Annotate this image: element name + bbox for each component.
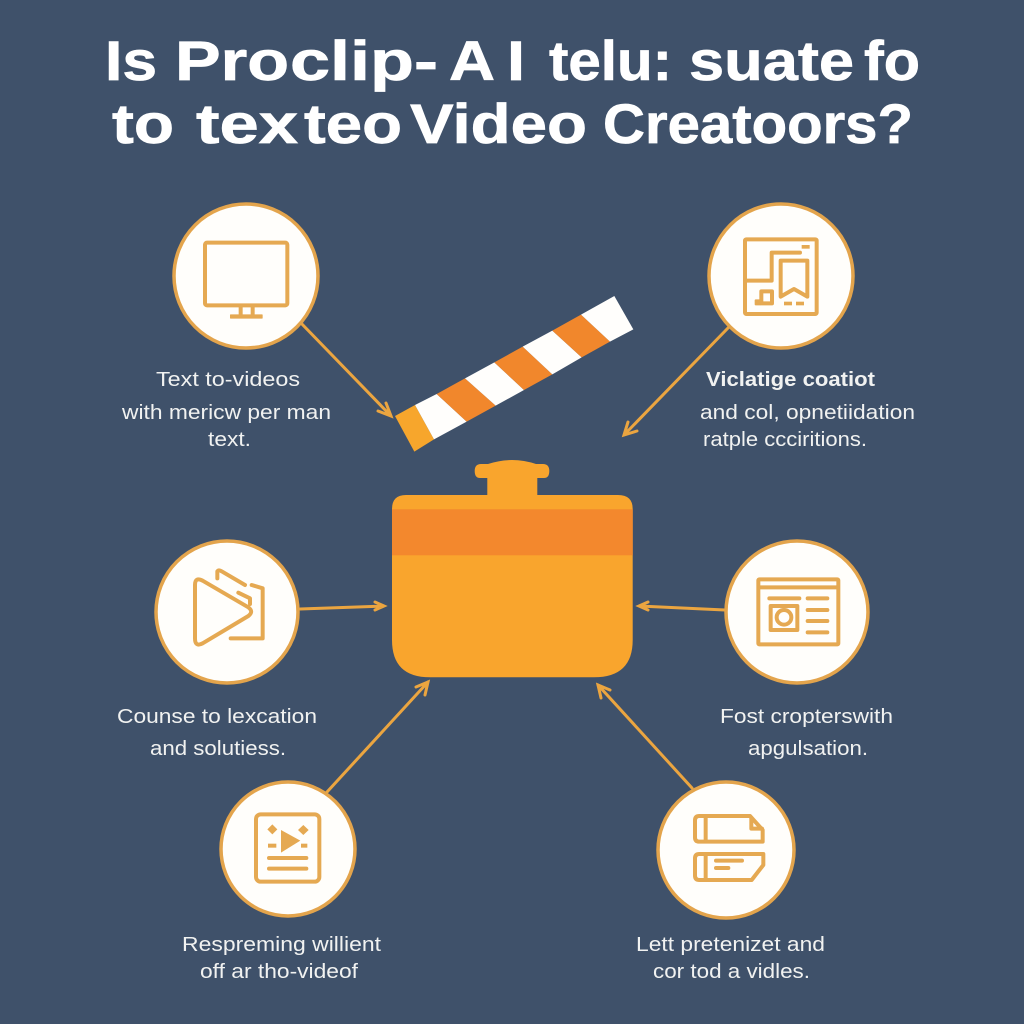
arrow: mid-left to pot: [300, 602, 384, 610]
title: telu:: [549, 29, 672, 92]
label: apgulsation.: [748, 737, 868, 760]
icon: browser window: [758, 579, 838, 644]
label: and col, opnetiidation: [700, 401, 915, 424]
clapperboard stripe bar: [395, 296, 633, 452]
label: Lett pretenizet and: [636, 933, 825, 956]
title: tex: [196, 92, 298, 155]
arrow: mid-right to pot: [639, 602, 725, 610]
icon: play with folder: [195, 570, 263, 645]
label: off ar tho-videof: [200, 960, 358, 983]
circle badge: layout: [709, 204, 853, 348]
panel: video script: [182, 782, 381, 983]
label: and solutiess.: [150, 737, 286, 760]
circle badge: clips: [658, 782, 794, 918]
label: Fost cropterswith: [720, 705, 893, 728]
title: Creatoors?: [603, 92, 913, 155]
label: with mericw per man: [121, 401, 331, 424]
title: [105, 29, 920, 155]
title: A: [449, 29, 495, 92]
arrow: top-right to clapper: [624, 328, 728, 435]
circle badge: script: [221, 782, 355, 916]
title: clip-: [290, 29, 438, 92]
label: [720, 705, 893, 760]
arrow: top-left to clapper: [300, 322, 391, 416]
panel: play folder: [117, 541, 317, 760]
icon: monitor: [205, 243, 287, 319]
label: [121, 368, 331, 451]
label: ratple ccciritions.: [703, 428, 867, 451]
label: text.: [208, 428, 251, 451]
icon: video document: [256, 814, 319, 882]
label: Counse to lexcation: [117, 705, 317, 728]
icon: stacked clips: [695, 816, 763, 880]
arrow: bottom-left to pot: [327, 682, 428, 792]
label: [636, 933, 825, 983]
circle badge: play: [156, 541, 298, 683]
title: to: [112, 92, 174, 155]
label: [117, 705, 317, 760]
panel: clips: [636, 782, 825, 983]
arrow: bottom-right to pot: [598, 685, 692, 788]
label: Text to-videos: [156, 368, 300, 391]
title: Video: [410, 92, 587, 155]
title: teo: [304, 92, 402, 155]
title: I: [507, 29, 525, 92]
label: Respreming willient: [182, 933, 381, 956]
central pot body: [392, 460, 633, 677]
title: suate: [689, 29, 854, 92]
label: [700, 368, 915, 451]
circle badge: browser: [726, 541, 868, 683]
circle badge: monitor: [174, 204, 318, 348]
label: Viclatige coatiot: [706, 368, 875, 391]
label: cor tod a vidles.: [653, 960, 810, 983]
icon: layout with bookmark: [745, 239, 817, 314]
panel: visual content: [700, 204, 915, 451]
title: fo: [864, 29, 920, 92]
panel: web page: [720, 541, 893, 760]
title: Pro: [175, 29, 289, 92]
title: Is: [105, 29, 157, 92]
panel: text to video: [121, 204, 331, 451]
label: [182, 933, 381, 983]
